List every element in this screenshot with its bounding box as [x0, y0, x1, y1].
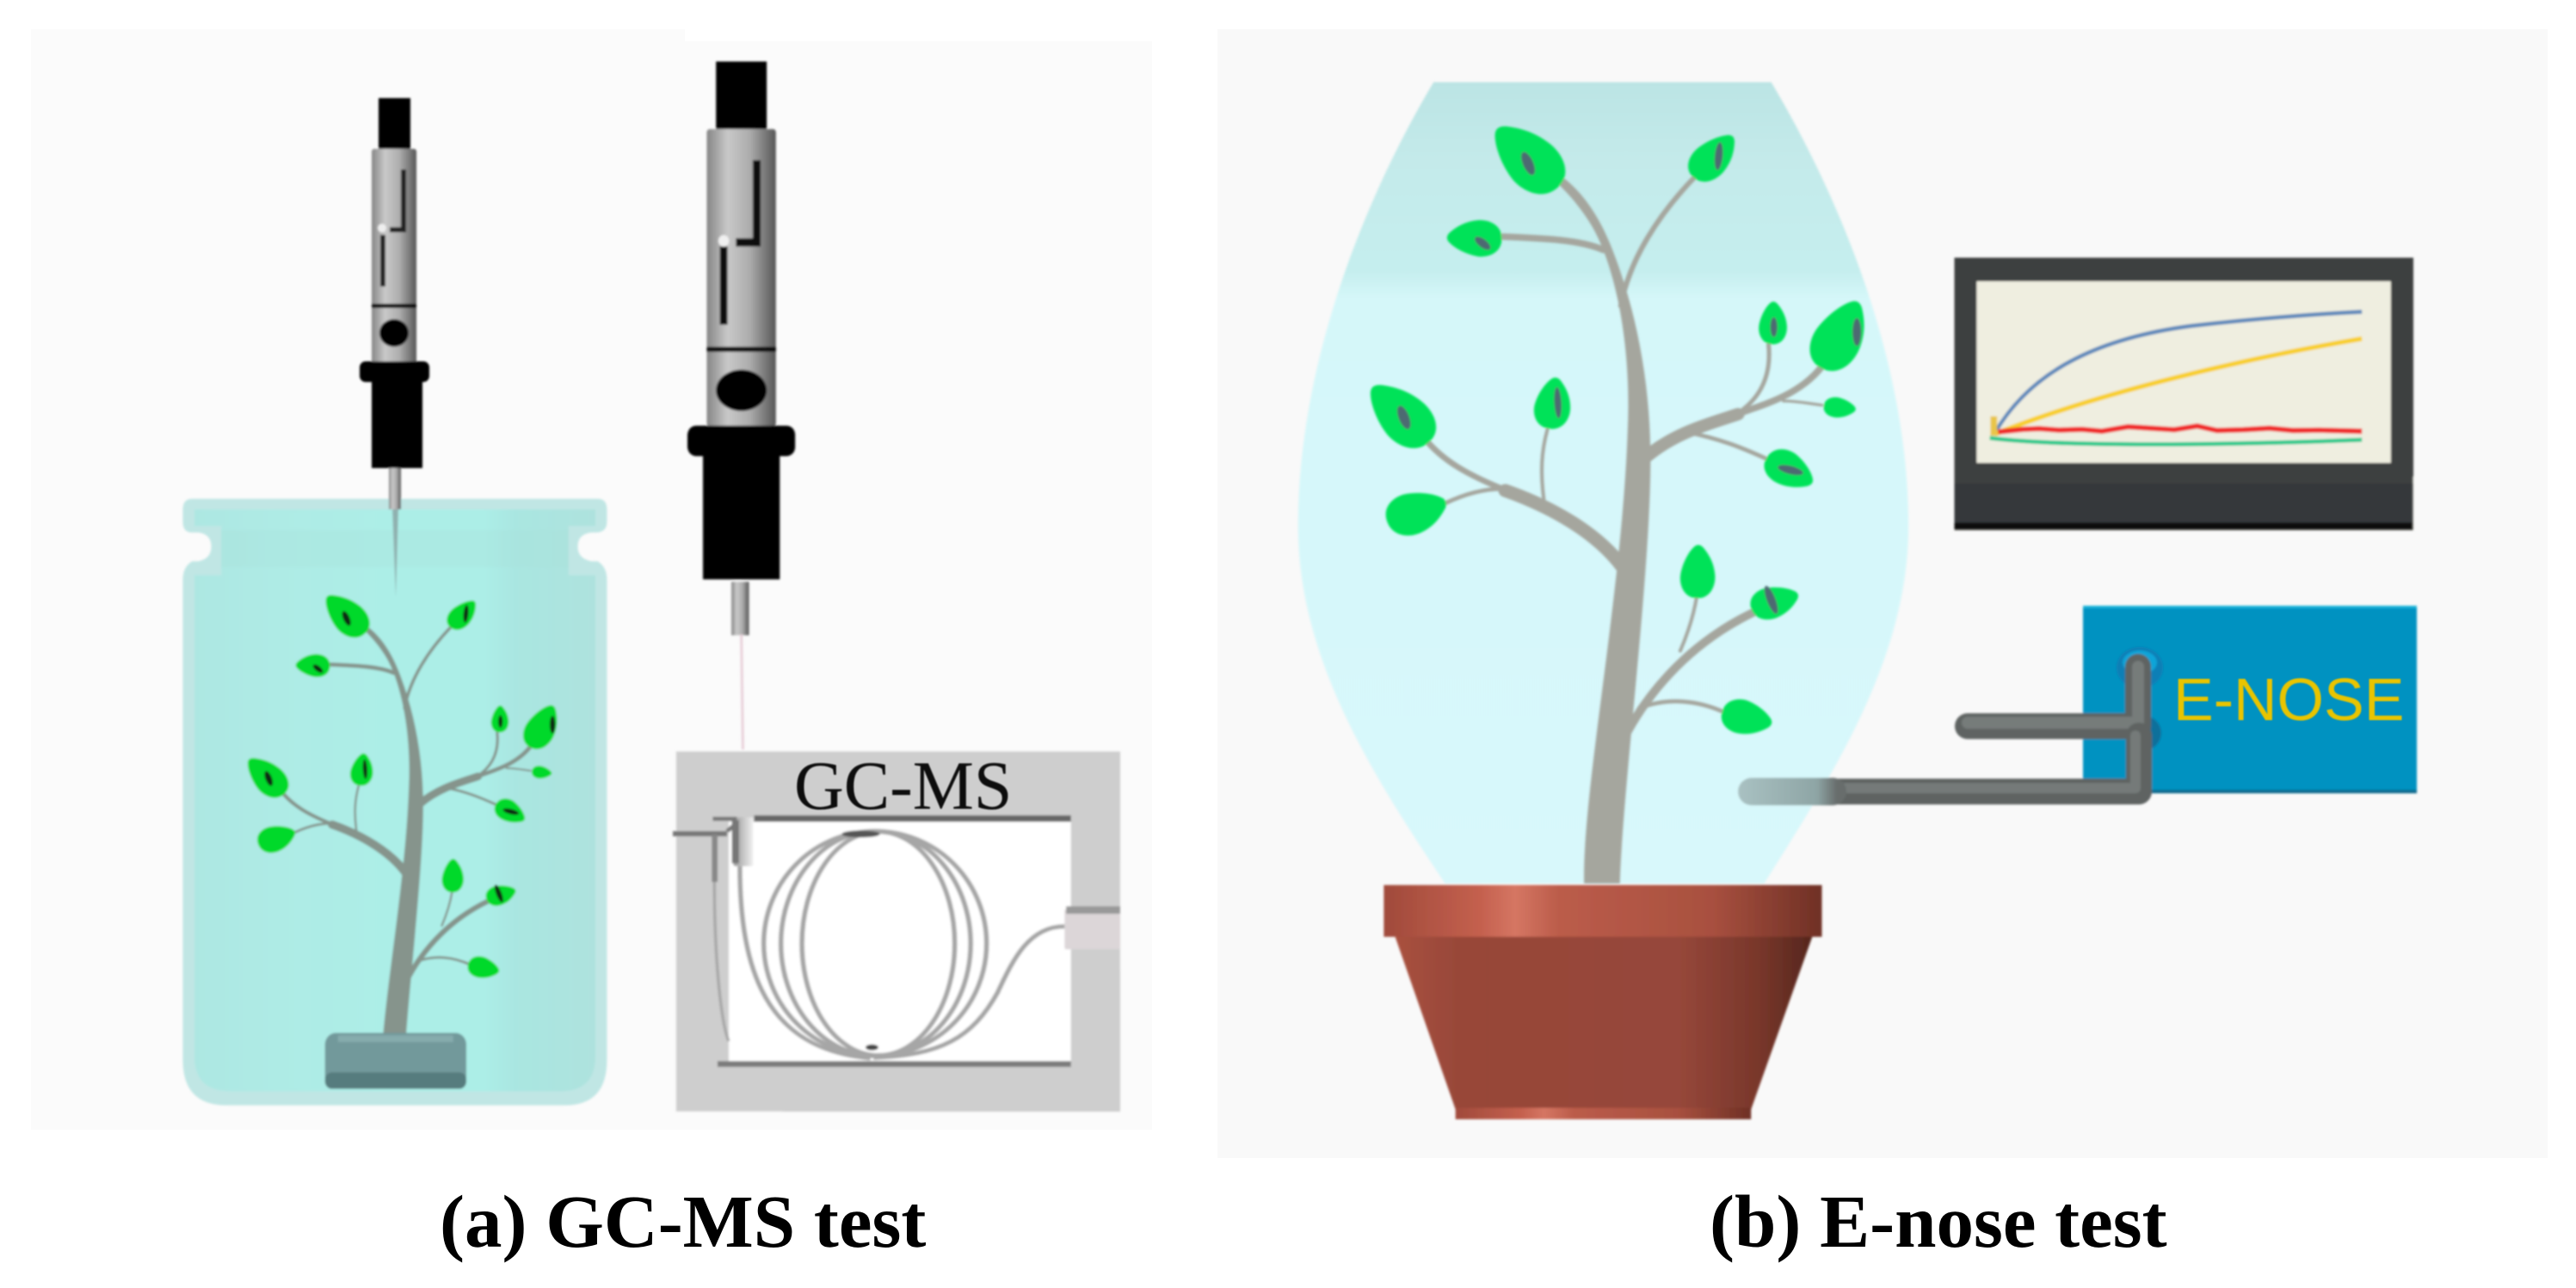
needle tip entering jar	[392, 508, 398, 597]
panel: GC-MS test background	[31, 29, 1152, 1130]
plant holder block	[325, 1033, 466, 1089]
plant inside jar	[237, 586, 566, 1072]
illustration: E-nose test artwork	[1298, 83, 2417, 884]
caption: (a) GC-MS test: (a) GC-MS test	[440, 1180, 926, 1263]
monitor	[1954, 258, 2413, 530]
label: GC-MS: GC-MS	[794, 749, 1012, 824]
syringe left	[360, 98, 429, 509]
caption: (b) E-nose test: (b) E-nose test	[1710, 1180, 2167, 1263]
illustration: GC-MS test artwork	[183, 62, 1120, 1112]
injector	[733, 817, 753, 866]
glass dome	[1298, 83, 1908, 884]
column coil	[714, 831, 1064, 1058]
detector port	[1064, 909, 1120, 949]
plant under dome	[1354, 111, 1878, 884]
GC-MS instrument box	[673, 751, 1120, 1112]
flower pot	[1384, 885, 1822, 1119]
sampling pipes	[1752, 667, 2139, 792]
syringe right	[687, 62, 795, 749]
label: E-NOSE: E-NOSE	[2173, 666, 2404, 733]
sensor response curves	[1990, 311, 2362, 444]
e-nose unit box	[2083, 606, 2417, 793]
panel: E-nose test background	[1217, 29, 2548, 1158]
jar	[183, 499, 607, 1106]
